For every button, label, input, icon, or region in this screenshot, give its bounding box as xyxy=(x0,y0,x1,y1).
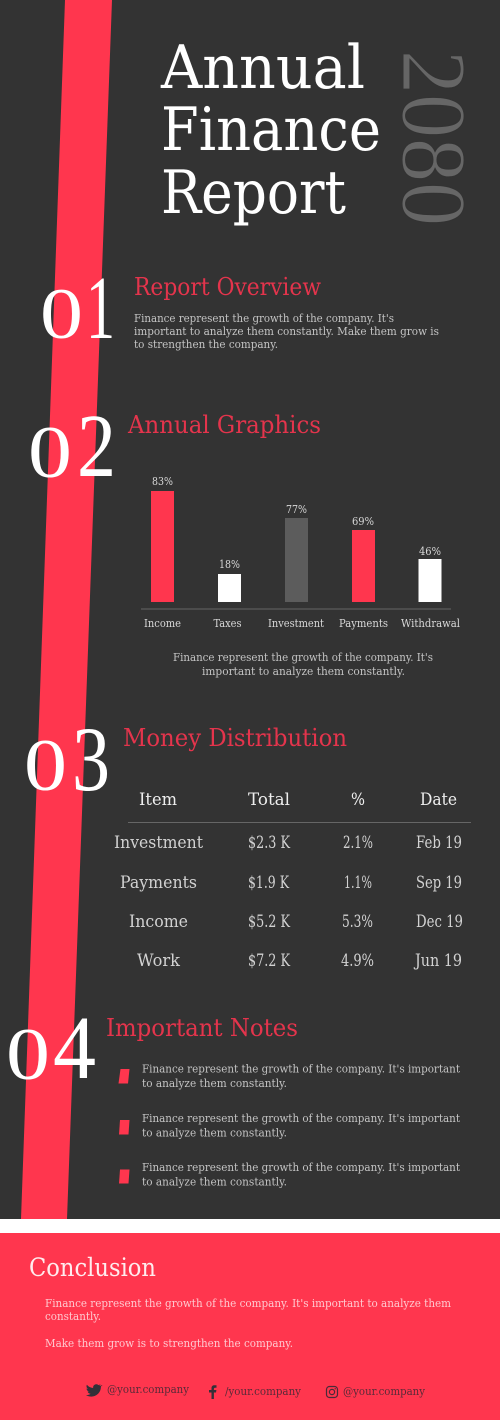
number 01 xyxy=(40,259,115,358)
heading: report overview: Report Overview xyxy=(134,272,321,301)
overview text: important to analyze them constantly. Make them grow is xyxy=(134,324,439,338)
diagonal red band xyxy=(21,0,112,1219)
social: twitter xyxy=(86,1382,189,1397)
conclusion text: Make them grow is to strengthen the company. xyxy=(45,1336,293,1350)
note 2: to analyze them constantly. xyxy=(142,1126,287,1140)
number 04 xyxy=(6,999,96,1098)
bar chart: 18% xyxy=(219,558,240,571)
title xyxy=(160,33,381,228)
year 2080: 2080 xyxy=(383,50,485,226)
conclusion text: Finance represent the growth of the company. It's important to analyze them xyxy=(45,1296,451,1310)
heading: important notes: Important Notes xyxy=(106,1013,298,1042)
bar chart: Withdrawal xyxy=(401,617,460,630)
table: Item xyxy=(139,790,177,809)
overview text: to strengthen the company. xyxy=(134,337,278,351)
note 3: to analyze them constantly. xyxy=(142,1174,287,1188)
title: Report xyxy=(161,158,346,228)
number 03 xyxy=(24,708,110,810)
table: Sep 19 xyxy=(416,873,462,892)
table: Total xyxy=(248,790,290,809)
note 3 xyxy=(119,1160,460,1188)
table: 1.1% xyxy=(344,873,372,892)
number 02 xyxy=(28,397,116,496)
table: Work xyxy=(137,951,181,970)
conclusion heading: Conclusion xyxy=(29,1253,156,1282)
chart caption: important to analyze them constantly. xyxy=(202,664,405,678)
note 2: Finance represent the growth of the company. It's important xyxy=(142,1111,460,1125)
conclusion text xyxy=(45,1296,451,1350)
number 01: 1 xyxy=(86,259,115,358)
bar chart: 77% xyxy=(286,503,307,516)
table: $2.3 K xyxy=(248,833,291,852)
table xyxy=(114,790,471,970)
table: $5.2 K xyxy=(248,912,291,931)
table: 4.9% xyxy=(341,951,374,970)
table: Income xyxy=(129,912,188,931)
bar chart: Taxes xyxy=(214,617,242,630)
table: % xyxy=(351,790,365,809)
overview text xyxy=(134,311,439,351)
table: 5.3% xyxy=(342,912,373,931)
chart caption: Finance represent the growth of the company. It's xyxy=(173,650,433,664)
note 1: to analyze them constantly. xyxy=(142,1076,287,1090)
table: Date xyxy=(420,790,457,809)
note 3: Finance represent the growth of the company. It's important xyxy=(142,1160,460,1174)
panel: conclusion xyxy=(0,1233,500,1420)
bar chart: 46% xyxy=(419,545,441,558)
bar chart: Investment xyxy=(268,617,325,630)
section 02: annual graphics xyxy=(28,397,460,678)
number 04: 0 xyxy=(6,1014,50,1096)
white divider xyxy=(0,1219,500,1233)
section 04: important notes xyxy=(6,999,460,1188)
number 02: 2 xyxy=(77,397,116,496)
table: Payments xyxy=(120,873,197,892)
bar chart xyxy=(141,475,460,630)
table: 2.1% xyxy=(343,833,373,852)
table: Jun 19 xyxy=(413,951,462,970)
number 03: 3 xyxy=(72,708,110,810)
bar chart: Income xyxy=(144,617,181,630)
bar chart: Payments xyxy=(339,617,388,630)
social: instagram: @your.company xyxy=(343,1384,425,1398)
table: $1.9 K xyxy=(248,873,290,892)
number 02: 0 xyxy=(28,412,72,494)
section 01: report overview xyxy=(40,259,439,358)
social: twitter: @your.company xyxy=(107,1382,189,1396)
table: $7.2 K xyxy=(248,951,291,970)
title: Annual xyxy=(160,33,365,103)
table: Investment xyxy=(114,833,203,852)
overview text: Finance represent the growth of the company. It's xyxy=(134,311,394,325)
number 03: 0 xyxy=(24,725,67,807)
note 2 xyxy=(119,1111,460,1140)
chart caption xyxy=(173,650,433,678)
number 01: 0 xyxy=(40,274,83,354)
bar chart: 83% xyxy=(152,475,173,488)
heading: annual graphics: Annual Graphics xyxy=(127,410,321,439)
table: Dec 19 xyxy=(416,912,463,931)
table: Feb 19 xyxy=(416,833,462,852)
number 04: 4 xyxy=(53,999,96,1098)
heading: money distribution: Money Distribution xyxy=(123,723,347,752)
note 1: Finance represent the growth of the company. It's important xyxy=(142,1062,460,1076)
section 03: money distribution xyxy=(24,708,471,970)
bar chart: 69% xyxy=(352,515,374,528)
note 1 xyxy=(118,1062,460,1090)
title: Finance xyxy=(161,95,381,165)
social: facebook: /your.company xyxy=(225,1384,301,1398)
conclusion text: constantly. xyxy=(45,1309,101,1323)
